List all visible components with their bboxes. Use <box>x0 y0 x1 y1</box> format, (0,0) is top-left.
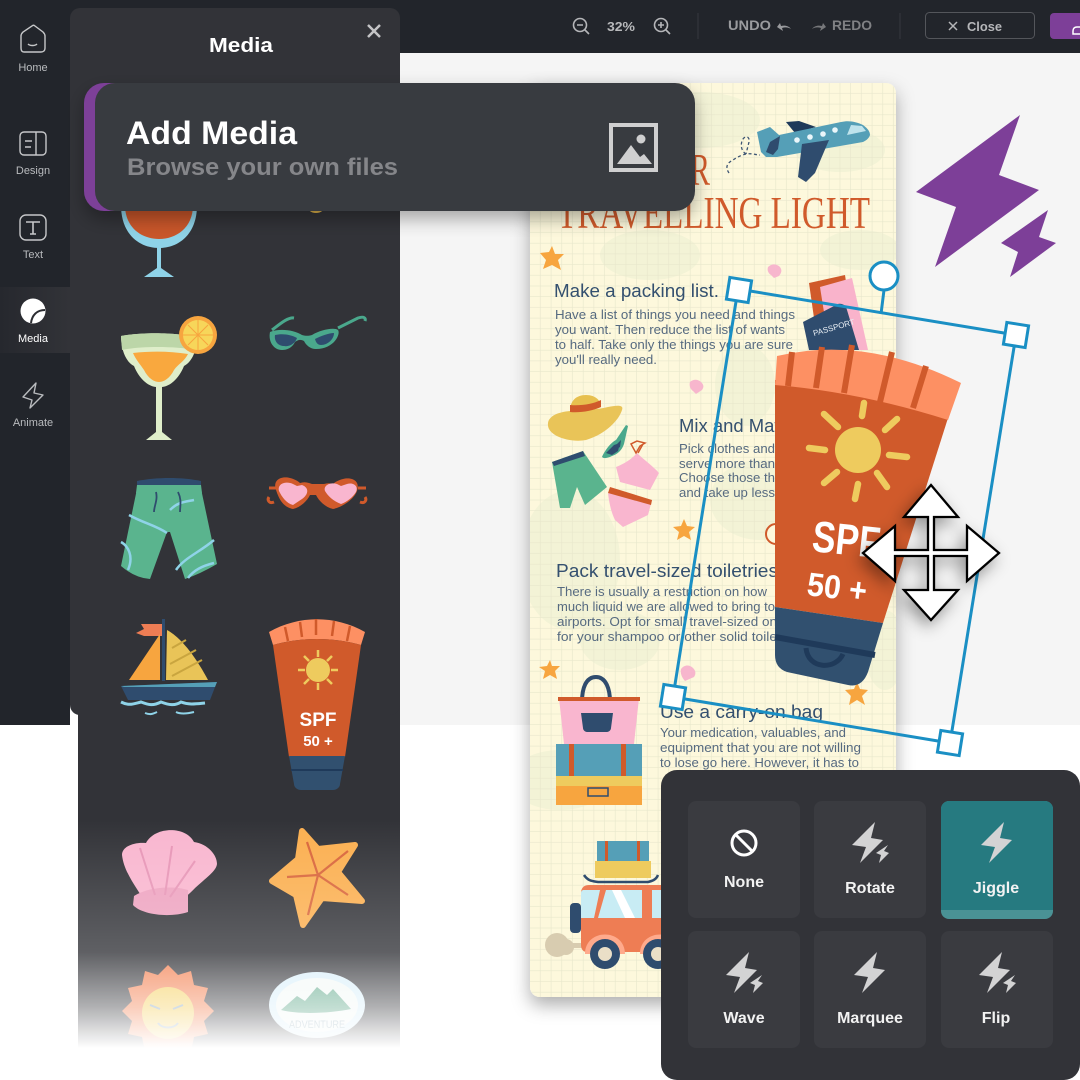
panel title: Media <box>209 35 274 57</box>
SPF label: SPF <box>810 512 883 568</box>
panel close icon <box>368 25 380 37</box>
section: make a packing list: you want. Then reduce the list of wants <box>555 323 785 337</box>
canvas background <box>400 53 1080 725</box>
section: mix and match <box>679 416 799 500</box>
selection box <box>660 262 1029 756</box>
small sunscreen tube <box>269 619 365 790</box>
nav: animate: Animate <box>13 417 53 429</box>
option: none: None <box>724 874 764 891</box>
close button: Close <box>967 19 1002 34</box>
section: make a packing list: Make a packing list. <box>554 281 719 301</box>
small sunscreen tube: 50 + <box>303 733 333 750</box>
option: wave: Wave <box>723 1010 765 1027</box>
option: flip <box>941 931 1053 1048</box>
undo: UNDO <box>728 17 771 33</box>
margarita <box>121 316 217 440</box>
red drink <box>121 205 197 277</box>
section: carry-on bag <box>660 702 861 770</box>
section: make a packing list: you'll really need. <box>555 353 657 367</box>
section: carry-on bag: Your medication, valuables, and <box>660 726 846 740</box>
option: marquee: Marquee <box>837 1010 903 1027</box>
sailboat <box>121 619 217 714</box>
export button <box>1050 13 1080 39</box>
swim shorts <box>121 478 217 579</box>
starfish decorations <box>539 246 868 705</box>
card subheading: Browse your own files <box>127 154 398 181</box>
heart sunglasses <box>268 477 366 509</box>
nav: text: Text <box>23 249 43 261</box>
smiling sun <box>122 965 214 1057</box>
nav: design <box>16 132 50 177</box>
option: jiggle selected <box>941 801 1053 919</box>
undo <box>728 17 791 33</box>
small sunscreen tube: SPF <box>300 710 336 731</box>
nav: home: Home <box>18 62 48 74</box>
adventure badge <box>269 972 365 1038</box>
sidebar <box>0 0 70 725</box>
section: make a packing list <box>554 281 795 367</box>
sunscreen tube selected <box>775 345 961 685</box>
section: mix and match: and take up less <box>679 486 775 500</box>
nav: home <box>18 25 48 74</box>
redo <box>812 17 872 33</box>
adventure badge: ADVENTURE <box>289 1019 345 1031</box>
section: mix and match: Mix and Match <box>679 416 799 436</box>
shell <box>122 830 217 915</box>
zoom out icon <box>574 18 589 34</box>
section: toiletries <box>556 561 778 644</box>
option: rotate: Rotate <box>845 880 895 897</box>
section: toiletries: Pack travel-sized toiletries <box>556 561 778 581</box>
section: toiletries: There is usually a restriction on how <box>557 585 768 599</box>
redo: REDO <box>832 17 872 33</box>
luggage illustration <box>556 677 642 805</box>
move cursor <box>863 485 999 620</box>
partially hidden yellow item <box>307 205 325 213</box>
poster title: R <box>690 144 710 195</box>
section: toiletries: much liquid we are allowed to bring to <box>557 600 775 614</box>
option: wave <box>688 931 800 1048</box>
clothes illustration <box>548 395 659 527</box>
green sunglasses <box>270 317 365 350</box>
50+ label: 50 + <box>805 565 869 609</box>
passport and ticket illustration: PASSPORT <box>812 317 856 338</box>
option: jiggle selected: Jiggle <box>973 880 1019 897</box>
poster <box>510 83 905 997</box>
option: none <box>688 801 800 918</box>
option: rotate <box>814 801 926 918</box>
option: flip: Flip <box>982 1010 1010 1027</box>
close button <box>926 12 1034 38</box>
add media card <box>84 83 695 211</box>
lightning bolts <box>916 115 1056 277</box>
media panel <box>70 8 400 1060</box>
section: toiletries: for your shampoo or other solid toile <box>557 630 777 644</box>
card heading: Add Media <box>126 115 297 151</box>
image icon <box>611 125 656 170</box>
corner handles <box>660 277 1029 756</box>
van illustration <box>545 841 680 969</box>
zoom in icon <box>654 18 670 34</box>
section: carry-on bag: equipment that you are not willing <box>660 741 861 755</box>
compass icon <box>766 524 786 544</box>
plane illustration <box>727 121 870 182</box>
nav: media: Media <box>18 333 49 345</box>
zoom level: 32% <box>607 19 635 34</box>
nav: animate <box>13 383 53 429</box>
section: carry-on bag: Use a carry-on bag <box>660 702 823 722</box>
section: mix and match: serve more than <box>679 457 775 471</box>
section: carry-on bag: to lose go here. However, it has to <box>660 756 859 770</box>
nav: design: Design <box>16 165 50 177</box>
section: toiletries: airports. Opt for small travel-sized on <box>557 615 777 629</box>
animation panel <box>661 770 1080 1080</box>
sun on tube <box>809 403 907 499</box>
section: mix and match: Pick clothes and <box>679 442 775 456</box>
poster title: TRAVELLING LIGHT <box>557 187 870 238</box>
section: mix and match: Choose those th <box>679 471 775 485</box>
faint world map <box>510 92 905 810</box>
section: make a packing list: Have a list of things you need and things <box>555 308 795 322</box>
nav: text <box>20 215 46 261</box>
rotate handle <box>870 262 898 290</box>
bottom fade <box>78 820 400 1060</box>
nav: media <box>18 298 49 345</box>
starfish <box>272 831 362 925</box>
shell decorations <box>681 264 781 681</box>
option: marquee <box>814 931 926 1048</box>
top toolbar <box>0 0 1080 53</box>
poster title <box>557 144 870 238</box>
passport and ticket illustration <box>803 275 868 350</box>
section: make a packing list: to half. Take only the things you are sure <box>555 338 793 352</box>
